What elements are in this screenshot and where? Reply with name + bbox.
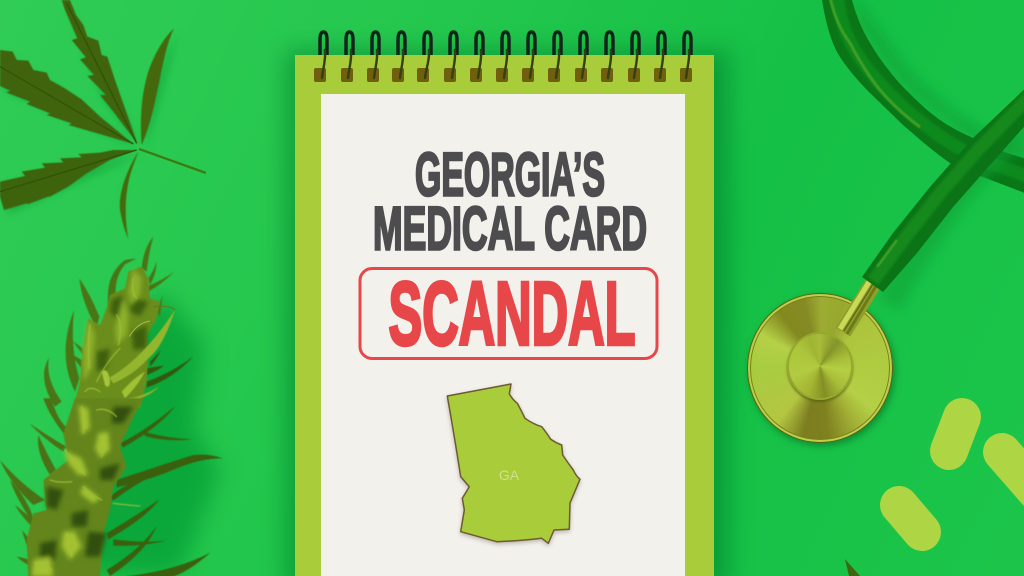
stethoscope stem and lower tube: [840, 84, 1024, 334]
scandal stamp: [360, 264, 657, 364]
notebook: [285, 32, 730, 576]
pills: [899, 417, 1024, 532]
heading: Medical Card: MEDICAL CARD: [373, 194, 647, 262]
scandal stamp: SCANDAL: [388, 264, 636, 364]
cannabis bud: [0, 237, 223, 576]
coil holes and wires: [314, 50, 692, 82]
notebook cover: [295, 55, 714, 576]
small leaf tip: [845, 559, 860, 576]
paper sheet: [321, 94, 685, 576]
metal disc: [747, 293, 893, 443]
cannabis leaf: [0, 0, 205, 239]
state label: GA: [499, 467, 520, 483]
heading: Georgia's: GEORGIA’S: [415, 140, 605, 208]
Georgia state map: [447, 384, 580, 543]
lower bud: [0, 398, 223, 576]
upper bud: [44, 237, 193, 408]
coil backs: [320, 32, 691, 56]
inner disc: [787, 332, 853, 400]
